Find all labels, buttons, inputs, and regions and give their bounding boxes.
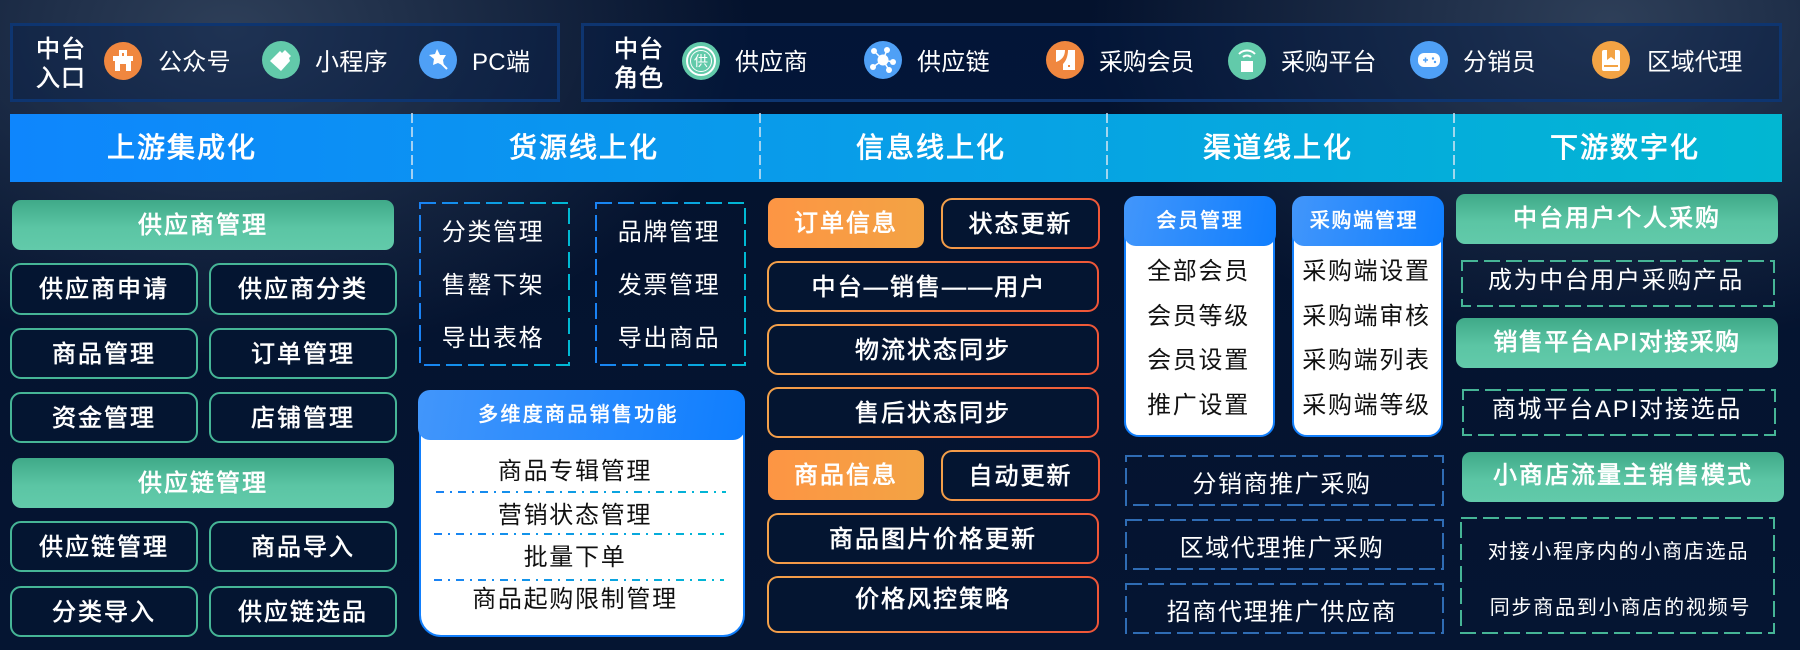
panel: 中台入口: [10, 23, 560, 102]
panel: 品牌管理 group: 品牌管理: [618, 219, 720, 246]
panel: 会员管理: 推广设置: [1147, 392, 1250, 419]
heading: 中台入口: [36, 36, 86, 92]
box: 招商代理推广供应商: 招商代理推广供应商: [1167, 599, 1397, 626]
button: 中台—销售——用户: [767, 261, 1099, 312]
panel: 中台角色: [581, 23, 1782, 102]
heading: 小商店流量主销售模式: 小商店流量主销售模式: [1493, 462, 1753, 489]
panel: 多维度商品销售功能: 营销状态管理: [498, 502, 652, 529]
icon: 采购平台: [1228, 42, 1266, 80]
text: 采购平台: 采购平台: [1281, 49, 1376, 76]
text: 分销员: 分销员: [1463, 49, 1536, 76]
button: 资金管理: [10, 392, 198, 443]
text: 供应链: 供应链: [917, 49, 990, 76]
button: 供应商申请: 供应商申请: [39, 276, 169, 303]
box: 分销商推广采购: 分销商推广采购: [1192, 471, 1372, 498]
box: 成为中台用户采购产品: 成为中台用户采购产品: [1488, 267, 1744, 294]
button: 商品管理: [10, 328, 198, 379]
panel: 分类管理 group: 导出表格: [442, 325, 544, 352]
panel: 会员管理: 会员等级: [1147, 303, 1250, 330]
panel: 分类管理 group: [419, 202, 570, 366]
panel: 采购端管理: 采购端审核: [1302, 303, 1431, 330]
box: 小商店选品与视频号: [1460, 517, 1775, 634]
heading: 中台用户个人采购: 中台用户个人采购: [1513, 205, 1721, 232]
button: 商品图片价格更新: 商品图片价格更新: [829, 526, 1037, 552]
panel: 品牌管理 group: 发票管理: [618, 272, 720, 299]
button: 供应商分类: [209, 263, 397, 315]
heading: 中台入口: 中台: [36, 36, 86, 63]
tag: 商品信息: [768, 450, 924, 500]
heading: 销售平台API对接采购: [1456, 318, 1778, 368]
icon: 分销员: [1410, 41, 1448, 79]
header band: 五大阶段: [10, 114, 1782, 182]
panel: 供应链管理 header: 供应链管理: [138, 470, 268, 497]
heading: 上游集成化: 上游集成化: [107, 132, 257, 163]
button: 物流状态同步: [767, 324, 1099, 375]
panel: 会员管理: 会员管理: [1156, 210, 1244, 232]
heading: 小商店流量主销售模式: [1462, 452, 1784, 502]
button: 订单管理: 订单管理: [251, 340, 355, 368]
button: 供应链选品: [209, 586, 397, 637]
icon: 公众号: [104, 42, 142, 80]
heading: 中台角色: 角色: [614, 65, 664, 92]
button: 售后状态同步: 售后状态同步: [855, 400, 1011, 426]
heading: 货源线上化: 货源线上化: [509, 132, 659, 163]
tag: 商品信息: 商品信息: [794, 462, 898, 489]
button: 物流状态同步: 物流状态同步: [855, 336, 1011, 364]
icon: 供应链: [864, 41, 902, 79]
button: 价格风控策略: 价格风控策略: [855, 586, 1011, 613]
icon: 供应商: 供: [694, 53, 708, 69]
tag: 订单信息: 订单信息: [794, 210, 898, 237]
box: 区域代理推广采购: [1125, 519, 1444, 570]
button: 状态更新: [941, 198, 1100, 249]
text: 小程序: 小程序: [315, 49, 388, 76]
panel: 供应商管理 header: [12, 200, 394, 250]
text: 公众号: 公众号: [158, 49, 231, 76]
box: 商城平台API对接选品: [1462, 389, 1776, 436]
heading: 信息线上化: 信息线上化: [856, 132, 1006, 163]
panel: 多维度商品销售功能: 商品专辑管理: [498, 458, 652, 485]
box: 小商店选品与视频号: 同步商品到小商店的视频号: [1490, 597, 1751, 619]
panel: 多维度商品销售功能: 多维度商品销售功能: [478, 404, 679, 426]
panel: 品牌管理 group: 导出商品: [618, 325, 720, 352]
icon: 供应商: [682, 42, 720, 80]
button: 供应链管理: 供应链管理: [39, 534, 169, 560]
text: 区域代理: 区域代理: [1647, 49, 1742, 76]
panel: 采购端管理: 采购端管理: [1310, 210, 1418, 232]
panel: 多维度商品销售功能: [418, 390, 745, 637]
panel: 会员管理: [1124, 196, 1276, 437]
panel: 会员管理: 会员设置: [1147, 347, 1250, 374]
button: 供应链选品: 供应链选品: [238, 598, 368, 626]
button: 商品导入: [209, 521, 397, 572]
button: 状态更新: 状态更新: [968, 210, 1072, 238]
panel: 分类管理 group: 售罄下架: [442, 272, 544, 299]
box: 小商店选品与视频号: 对接小程序内的小商店选品: [1488, 541, 1749, 563]
box: 分销商推广采购: [1125, 455, 1444, 506]
divider 2: [759, 113, 761, 179]
heading: 销售平台API对接采购: 销售平台API对接采购: [1493, 329, 1741, 356]
button: 商品管理: 商品管理: [52, 340, 156, 368]
box: 商城平台API对接选品: 商城平台API对接选品: [1492, 396, 1742, 423]
icon: PC端: [419, 41, 457, 79]
button: 分类导入: [10, 586, 198, 637]
icon: 区域代理: [1592, 41, 1630, 79]
tag: 订单信息: [768, 198, 924, 248]
heading: 中台角色: [614, 36, 664, 92]
button: 价格风控策略: [767, 576, 1099, 633]
button: 自动更新: [941, 450, 1100, 501]
button: 供应商分类: 供应商分类: [238, 276, 368, 303]
panel: 品牌管理 group: [595, 202, 746, 366]
divider 3: [1106, 113, 1108, 179]
panel: 采购端管理: 采购端等级: [1302, 392, 1431, 419]
panel: 采购端管理: [1292, 196, 1444, 437]
button: 售后状态同步: [767, 387, 1099, 438]
button: 自动更新: 自动更新: [968, 462, 1072, 490]
button: 供应商申请: [10, 263, 198, 315]
button: 订单管理: [209, 328, 397, 379]
button: 商品图片价格更新: [767, 513, 1099, 564]
panel: 多维度商品销售功能: 商品起购限制管理: [472, 586, 678, 613]
heading: 中台角色: 中台: [614, 36, 664, 63]
icon: 采购会员: [1046, 41, 1084, 79]
button: 中台—销售——用户: 中台—销售——用户: [812, 274, 1046, 300]
text: PC端: PC端: [472, 49, 530, 76]
button: 资金管理: 资金管理: [52, 404, 156, 432]
text: 采购会员: 采购会员: [1099, 49, 1194, 76]
button: 供应链管理: [10, 521, 198, 572]
box: 招商代理推广供应商: [1125, 583, 1444, 634]
panel: 供应链管理 header: [12, 458, 394, 508]
heading: 下游数字化: 下游数字化: [1550, 132, 1700, 163]
button: 店铺管理: [209, 392, 397, 443]
panel: 供应商管理 header: 供应商管理: [138, 212, 268, 239]
box: 区域代理推广采购: 区域代理推广采购: [1180, 535, 1384, 562]
panel: 会员管理: 全部会员: [1147, 258, 1250, 285]
button: 店铺管理: 店铺管理: [251, 404, 355, 432]
button: 分类导入: 分类导入: [52, 598, 156, 626]
panel: 采购端管理: 采购端设置: [1302, 258, 1431, 285]
panel: 多维度商品销售功能: 批量下单: [524, 544, 626, 571]
divider 4: [1453, 113, 1455, 179]
panel: 分类管理 group: 分类管理: [442, 219, 544, 246]
button: 商品导入: 商品导入: [251, 534, 355, 560]
icon: 小程序: [262, 41, 300, 79]
text: 供应商: 供应商: [735, 49, 808, 76]
divider 1: [411, 113, 413, 179]
heading: 中台用户个人采购: [1456, 194, 1778, 244]
box: 成为中台用户采购产品: [1461, 260, 1775, 307]
panel: 采购端管理: 采购端列表: [1302, 347, 1431, 374]
heading: 中台入口: 入口: [36, 65, 86, 92]
heading: 渠道线上化: 渠道线上化: [1203, 132, 1353, 163]
